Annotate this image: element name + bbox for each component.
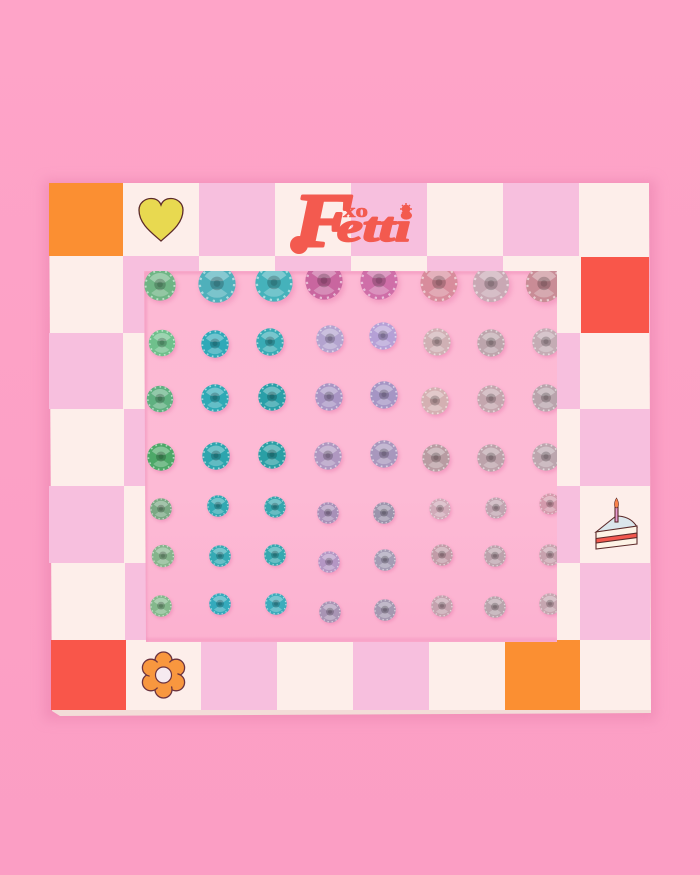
- icon: birthday cake: [596, 498, 637, 549]
- box shadow: [44, 180, 656, 720]
- left and right column checks: [49, 333, 650, 640]
- logo: xo Fetti: F: [292, 179, 353, 263]
- rhinestones row 5: [150, 493, 562, 526]
- rhinestones row 7: [150, 593, 562, 625]
- logo: xo Fetti: [290, 179, 412, 263]
- icon: heart: [139, 198, 183, 241]
- logo: xo Fetti: xo: [343, 201, 368, 222]
- rhinestones row 4: [147, 440, 561, 474]
- second row checks: [123, 256, 649, 333]
- icon: logo star: [400, 203, 412, 215]
- rhinestones row 1: [144, 271, 557, 308]
- rhinestones row 6: [152, 544, 562, 575]
- icon: flower: [142, 652, 185, 698]
- panel: window with rhinestones: [144, 262, 564, 642]
- logo swash: [290, 236, 308, 254]
- top row checks: [49, 183, 579, 256]
- logo: xo Fetti: etti: [337, 204, 412, 250]
- rhinestones row 3: [147, 381, 561, 417]
- bottom row checks: [51, 640, 580, 710]
- panel: checkered box card: [49, 183, 651, 716]
- rhinestones row 2: [149, 322, 561, 360]
